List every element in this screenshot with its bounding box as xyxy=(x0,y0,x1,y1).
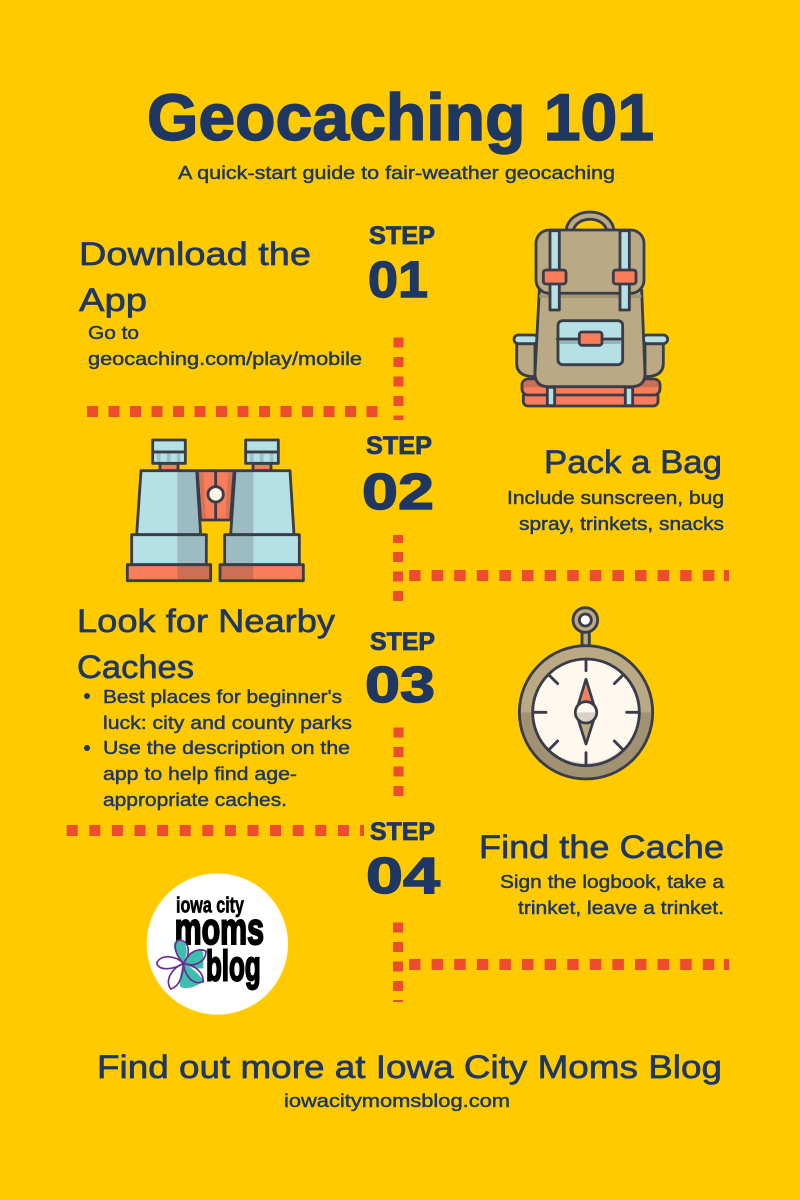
step 01 text: download the app: geocaching.com/play/mobile xyxy=(88,349,362,369)
icon: binoculars xyxy=(127,440,303,581)
step 03 text: look for nearby caches: Caches xyxy=(77,649,194,685)
step 01 text: download the app: Go to xyxy=(88,323,139,343)
title: Geocaching 101 xyxy=(147,80,654,154)
step 01 number xyxy=(368,222,435,308)
step 01 text: download the app xyxy=(79,236,362,369)
step 04 text: find the cache: trinket, leave a trinket. xyxy=(518,898,724,918)
step 02 text: pack a bag: spray, trinkets, snacks xyxy=(519,514,724,534)
step 01 text: download the app: App xyxy=(79,282,147,318)
step 01 number: 01 xyxy=(368,251,428,308)
step 02 text: pack a bag: Include sunscreen, bug xyxy=(507,488,724,508)
step 03 number xyxy=(365,628,435,713)
step 04 number: 04 xyxy=(366,847,441,904)
logo: iowa city moms blog: moms xyxy=(175,905,264,954)
step 01 text: download the app: Download the xyxy=(79,236,311,272)
logo: iowa city moms blog: iowa city xyxy=(176,893,245,918)
icon: backpack xyxy=(514,212,668,406)
step 04 number: STEP xyxy=(370,818,435,846)
step 02 number: STEP xyxy=(366,432,432,460)
step 03 text: look for nearby caches: Look for Nearby xyxy=(77,603,336,639)
step 03 text: look for nearby caches: luck: city and county parks xyxy=(103,713,352,733)
step 03 number: 03 xyxy=(365,656,435,713)
step 02 text: pack a bag: Pack a Bag xyxy=(544,444,722,480)
icon: flower xyxy=(157,940,206,989)
subtitle: A quick-start guide to fair-weather geocaching xyxy=(178,163,615,183)
step 03 text: look for nearby caches: app to help find age- xyxy=(103,764,297,784)
step 02 number: 02 xyxy=(362,463,434,520)
step 01 number: STEP xyxy=(369,222,435,250)
step 04 text: find the cache: Find the Cache xyxy=(479,829,724,865)
logo: iowa city moms blog: blog xyxy=(206,943,261,991)
step 03 text: look for nearby caches xyxy=(77,603,352,810)
icon: compass xyxy=(519,608,653,779)
step 02 text: pack a bag xyxy=(507,444,724,534)
logo: iowa city moms blog xyxy=(147,873,288,1015)
step 03 text: look for nearby caches: appropriate caches. xyxy=(103,790,287,810)
step 04 text: find the cache: Sign the logbook, take a xyxy=(500,872,725,892)
step 03 number: STEP xyxy=(370,628,435,656)
step 03 text: look for nearby caches: Best places for beginner's xyxy=(103,687,342,707)
step 03 text: look for nearby caches: Use the description on the xyxy=(103,738,350,758)
step 04 text: find the cache xyxy=(479,829,725,918)
step 02 number xyxy=(362,432,434,520)
footer url: iowacitymomsblog.com xyxy=(284,1091,510,1111)
step 04 number xyxy=(366,818,441,904)
footer heading: Find out more at Iowa City Moms Blog xyxy=(97,1049,722,1085)
